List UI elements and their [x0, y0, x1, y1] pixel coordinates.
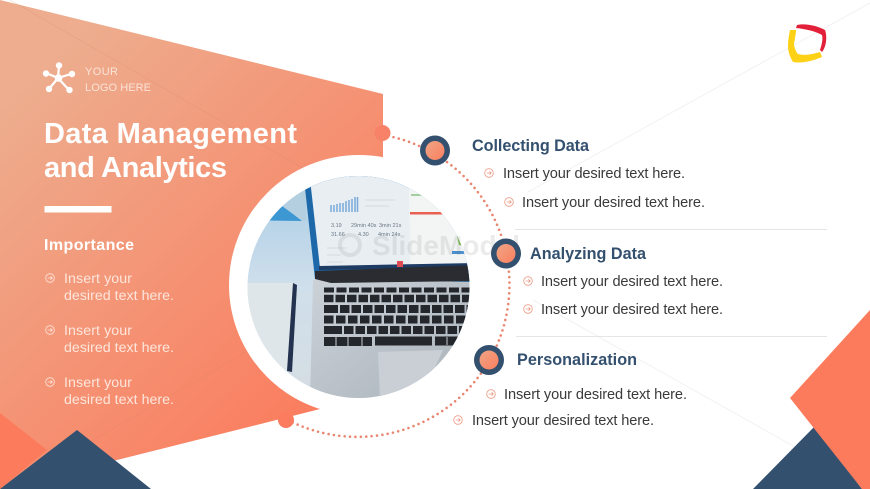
corner shapes: bottom right	[753, 310, 870, 489]
photo: laptop on desk: 4min 24s	[378, 232, 401, 238]
photo: laptop on desk: 3min 21s	[379, 223, 402, 229]
logo text: YOUR	[85, 66, 118, 78]
photo: laptop on desk: 31.66	[331, 232, 345, 238]
list: importance items	[46, 271, 174, 408]
item 2: Insert your desired text here.	[541, 302, 723, 318]
title underline	[44, 206, 112, 212]
heading: Personalization	[517, 351, 637, 369]
title	[44, 118, 297, 184]
screen	[303, 170, 475, 282]
arc end dot: bottom	[278, 412, 294, 428]
item 1: Insert your	[64, 271, 132, 287]
arc end dot: top	[374, 125, 390, 141]
icon: logo placeholder network	[43, 62, 75, 93]
photo: laptop on desk: 4.30	[358, 232, 369, 238]
dotted timeline arc	[286, 135, 509, 437]
item 1: desired text here.	[64, 288, 174, 304]
laptop base	[310, 280, 470, 398]
item 1	[46, 271, 174, 304]
node: collecting data	[420, 136, 450, 166]
keyboard	[324, 290, 472, 342]
item 2: Insert your desired text here.	[472, 413, 654, 429]
item 1: Insert your desired text here.	[541, 274, 723, 290]
heading: Analyzing Data	[530, 245, 647, 263]
item 2	[46, 323, 174, 356]
item 2: Insert your desired text here.	[522, 195, 705, 211]
logo text	[85, 66, 151, 94]
title: Data Management	[44, 118, 297, 150]
item 3: desired text here.	[64, 392, 174, 408]
item 2: Insert your	[64, 323, 132, 339]
heading: Collecting Data	[472, 137, 590, 155]
photo: laptop on desk: 29min 40s	[351, 223, 377, 229]
photo: laptop on desk	[247, 170, 475, 400]
watermark: SlideModel	[372, 230, 520, 261]
icon: brand logo	[788, 24, 826, 63]
photo: laptop on desk: 3.19	[331, 223, 342, 229]
node: analyzing data	[491, 238, 521, 268]
logo text: LOGO HERE	[85, 82, 151, 94]
node: personalization	[474, 345, 504, 375]
notebook	[248, 283, 293, 371]
item 2: desired text here.	[64, 340, 174, 356]
section: analyzing data	[524, 245, 723, 318]
section: collecting data	[472, 137, 705, 211]
white ring	[229, 155, 489, 415]
item 3: Insert your	[64, 375, 132, 391]
corner shapes: bottom left	[0, 413, 151, 489]
heading: importance: Importance	[44, 237, 134, 254]
panel: orange background	[0, 0, 383, 489]
screen chart	[331, 197, 358, 212]
item 1: Insert your desired text here.	[503, 166, 685, 182]
section: personalization	[454, 351, 687, 429]
item 3	[46, 375, 174, 408]
title: and Analytics	[44, 152, 227, 184]
item 1: Insert your desired text here.	[504, 387, 687, 403]
